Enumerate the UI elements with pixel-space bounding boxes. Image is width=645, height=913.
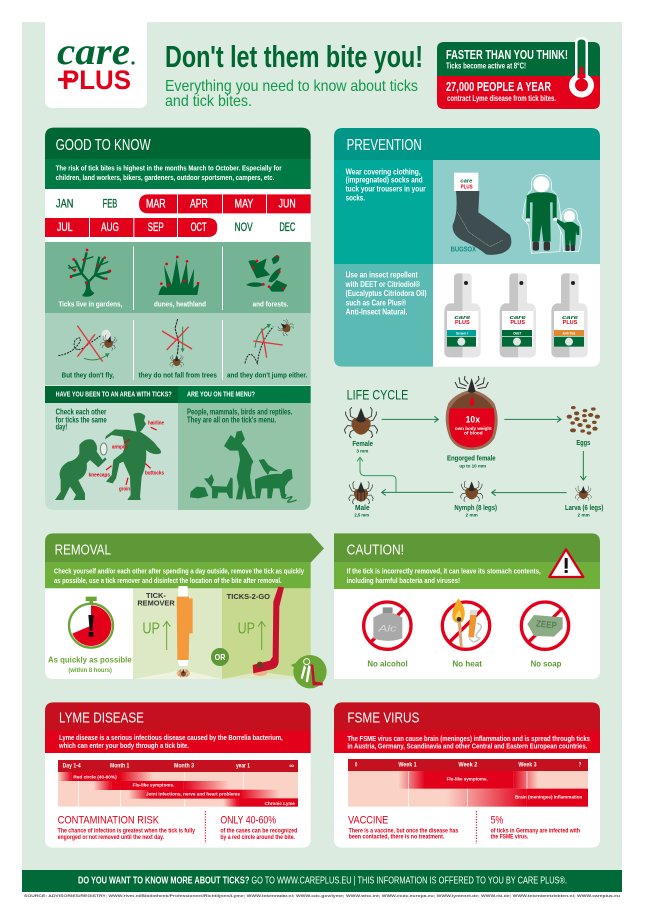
title: Don't let them bite you! <box>165 39 423 74</box>
panel: caution: No soap <box>531 660 561 669</box>
subtitle: and tick bites. <box>165 93 252 110</box>
timeline chart: fsme: Week 2 <box>458 763 478 769</box>
icon: repellent bottle, sensitive <box>444 273 481 357</box>
calendar of months: MAY <box>235 198 253 211</box>
text block: only 40-60%: ONLY 40-60% <box>220 815 276 827</box>
timeline chart: lyme: Red circle (40-60%) <box>73 774 117 780</box>
timeline chart: lyme: Flu-like symptoms. <box>133 783 175 789</box>
icon: sock: care <box>460 178 472 184</box>
text block: removal instructions: as possible, use a tick remover and disinfect the location of the bite after removal. <box>54 576 282 585</box>
misconceptions row: they do not fall from trees <box>139 370 217 379</box>
calendar of months: OCT <box>191 221 207 234</box>
heading: fsme virus <box>334 702 600 731</box>
icon: no soap: ZEEP <box>536 619 557 631</box>
heading: prevention <box>334 128 600 160</box>
stage: engorged female: of blood <box>464 430 483 436</box>
heading: good to know: GOOD TO KNOW <box>56 137 151 154</box>
badge: or <box>211 648 229 666</box>
repellent advice: Anti-Insect Natural. <box>346 308 407 317</box>
misconceptions row <box>45 313 311 385</box>
panel: caution: No heat <box>452 660 482 669</box>
text block: 5 percent: of ticks in Germany are infected with <box>491 829 580 835</box>
icon: repellent bottle, DEET: DEET <box>513 331 522 335</box>
icon: sock <box>451 173 511 255</box>
source line: SOURCE: ADVISORIES/REGISTRY; WWW.rivm.nl/Bibliotheek/Professioneel/Richtlijnen/Lyme; WWW.tekenradar.nl; WWW.cdc.gov/lyme; WWW.who.int; WWW.ecdc.europa.eu; WWW.lymenet.de; WWW.rki.de; WWW.tekenbeetziekten.nl; WWW.careplus.eu <box>24 894 620 898</box>
text block: removal instructions: Check yourself and/or each other after spending a day outside, remove the tick as quickly <box>54 567 305 576</box>
panel: tick check and menu <box>45 386 311 510</box>
heading: prevention: PREVENTION <box>347 137 422 154</box>
icon: repellent bottle, DEET: PLUS <box>510 320 525 326</box>
icon: repellent bottle, sensitive: care <box>454 315 470 321</box>
icon: leaves <box>246 255 287 292</box>
timeline chart: lyme: Joint infections, nerve and heart problems <box>146 792 240 798</box>
tool: ticks-2-go: UP <box>238 620 255 637</box>
habitat row: Ticks live in gardens, <box>58 300 122 309</box>
clothing advice <box>334 160 600 264</box>
stage: eggs <box>567 406 600 447</box>
body part labels: hairline <box>148 421 164 427</box>
timeline chart: fsme <box>348 759 588 807</box>
heading: removal <box>45 533 324 563</box>
stage: nymph <box>454 481 497 519</box>
text block: removal instructions <box>45 563 311 588</box>
stage: engorged female: 10x <box>466 415 480 425</box>
sub-panel: are you on the menu: ARE YOU ON THE MENU? <box>187 390 255 399</box>
timeline chart: fsme: Flu-like symptoms. <box>447 776 488 782</box>
repellent advice <box>334 264 600 367</box>
text block: vaccine: VACCINE <box>348 815 388 827</box>
text block: vaccine: There is a vaccine, but once the disease has <box>349 829 459 835</box>
header: logo <box>45 22 147 108</box>
clothing advice: socks. <box>346 194 365 203</box>
text block: lyme description <box>45 731 311 753</box>
clothing advice: tuck your trousers in your <box>346 185 426 194</box>
timeline chart: fsme: Week 1 <box>398 763 417 769</box>
stage: female tick: 3 mm <box>356 448 369 454</box>
stage: engorged female <box>446 376 498 469</box>
icon: repellent bottle, Anti-Insect: Anti-Tick <box>563 331 576 335</box>
timer: as quickly as possible: (within 8 hours) <box>68 667 112 674</box>
icon: adult and child in covering clothes <box>523 174 582 253</box>
stage: female tick: Female <box>352 441 373 448</box>
clothing advice: Wear covering clothing, <box>346 167 421 176</box>
sub-panel: have you been to an area with ticks: for ticks the same <box>56 415 107 424</box>
body part labels <box>89 421 164 493</box>
footer banner <box>22 870 622 892</box>
text block: only 40-60% <box>220 815 298 841</box>
stage: female tick <box>344 407 378 454</box>
subtitle: Everything you need to know about ticks <box>165 78 418 95</box>
repellent advice: such as Care Plus® <box>346 298 406 307</box>
sub-panel: are you on the menu: They are all on the tick's menu. <box>187 415 276 424</box>
icon: repellent bottle, sensitive: PLUS <box>455 320 470 326</box>
timeline chart: lyme: Month 3 <box>174 764 195 770</box>
icon: sock: BUGSOX <box>451 245 476 254</box>
calendar of months: AUG <box>101 221 119 234</box>
icon: tree <box>68 249 111 296</box>
icon: tick does not fly <box>58 326 118 362</box>
icon: repellent bottle, Anti-Insect <box>551 273 588 357</box>
text block: vaccine <box>348 815 459 841</box>
timeline chart: lyme: year 1 <box>236 764 251 770</box>
text block: contamination risk: engorged or not removed until the next day. <box>58 835 164 841</box>
panel: removal <box>45 533 327 688</box>
stage: engorged female: up to 10 mm <box>459 463 487 469</box>
calendar of months: SEP <box>148 221 164 234</box>
misconceptions row: But they don't fly, <box>62 370 114 379</box>
calendar of months: JUN <box>279 198 296 211</box>
text block: risk months: children, land workers, bikers, gardeners, outdoor sportsmen, campers, etc. <box>56 173 274 182</box>
stage: engorged female: Engorged female <box>447 456 496 463</box>
header: logo: PLUS <box>62 65 131 95</box>
text block: lyme description: which can enter your body through a tick bite. <box>58 741 189 750</box>
heading: caution: CAUTION! <box>347 542 404 558</box>
timeline chart: fsme: ? <box>579 763 582 769</box>
sub-panel: have you been to an area with ticks <box>45 386 178 510</box>
heading: fsme virus: FSME VIRUS <box>347 711 420 727</box>
stage: larva <box>565 486 603 519</box>
text block: vaccine: been contacted, there is no treatment. <box>349 835 445 841</box>
repellent advice: (Eucalyptus Citriodora Oil) <box>346 289 427 298</box>
calendar of months: JAN <box>56 198 73 211</box>
heading: lyme disease <box>45 702 311 731</box>
text block: caution warning <box>334 563 600 589</box>
text block: fsme description <box>334 731 600 753</box>
callout: facts with thermometer: 27,000 PEOPLE A YEAR <box>446 79 551 94</box>
icon: repellent bottle, Anti-Insect: PLUS <box>563 320 578 326</box>
icon: repellent bottle, sensitive: Sensor I <box>456 331 468 335</box>
icon: tick does not jump <box>245 318 295 363</box>
sub-panel: have you been to an area with ticks: Check each other <box>56 408 106 417</box>
badge: or: OR <box>215 652 226 662</box>
icon: warning triangle <box>549 549 583 577</box>
calendar of months: APR <box>190 198 208 211</box>
panel: caution <box>334 533 600 679</box>
callout: facts with thermometer: contract Lyme disease from tick bites. <box>447 94 556 103</box>
text block: caution warning: If the tick is incorrectly removed, it can leave its stomach contents, <box>347 567 541 576</box>
text block: only 40-60%: by a red circle around the bite. <box>220 835 295 841</box>
body part labels: buttocks <box>145 471 164 477</box>
callout: facts with thermometer: Ticks become active at 8°C! <box>446 62 526 70</box>
stage: eggs: Eggs <box>576 440 590 447</box>
tool: tick remover: TICK- <box>146 591 167 600</box>
callout: facts with thermometer: FASTER THAN YOU THINK! <box>446 47 568 62</box>
clothing advice: (impregnated) socks and <box>346 176 423 185</box>
text block: only 40-60%: of the cases can be recognized <box>220 829 298 835</box>
sub-panel: are you on the menu: People, mammals, birds and reptiles. <box>187 408 292 417</box>
text block: 5 percent: the FSME virus. <box>491 835 529 841</box>
timeline chart: fsme: 0 <box>355 763 358 769</box>
icon: no soap <box>521 602 569 649</box>
stage: larva: 2 mm <box>578 513 590 519</box>
stage: larva: Larva (6 legs) <box>565 505 603 512</box>
icon: crouching person with magnifier <box>55 439 107 500</box>
calendar of months: DEC <box>279 221 295 234</box>
repellent advice: Use an insect repellent <box>346 271 418 280</box>
panel: caution: No alcohol <box>367 660 408 669</box>
text block: risk months: The risk of tick bites is highest in the months March to October. Especially for <box>56 164 282 173</box>
subtitle <box>165 78 418 110</box>
arrows between stages <box>357 416 586 496</box>
timeline chart: lyme: Day 1-4 <box>63 764 81 770</box>
icon: no alcohol: Alc <box>377 624 397 634</box>
tool: tick remover <box>133 586 222 679</box>
panel: lyme disease <box>45 702 311 848</box>
timeline chart: fsme: Brain (meninges) inflammation <box>515 795 582 801</box>
tool: ticks-2-go: TICKS-2-GO <box>227 592 270 601</box>
habitat row <box>45 242 311 313</box>
icon: person, pets and animals silhouettes <box>190 431 293 499</box>
body part labels: kneecaps <box>89 473 110 479</box>
icon: repellent bottle, Anti-Insect: care <box>562 315 578 321</box>
calendar of months: FEB <box>103 198 117 211</box>
timer: as quickly as possible: As quickly as possible <box>48 655 132 665</box>
panel: fsme virus <box>334 702 600 848</box>
repellent advice: with DEET or Citriodiol® <box>345 280 420 289</box>
habitat row: dunes, heathland <box>154 300 206 309</box>
stage: male: 2,5 mm <box>354 513 369 519</box>
timeline chart: fsme: Week 3 <box>518 763 537 769</box>
heading: lyme disease: LYME DISEASE <box>59 711 144 727</box>
calendar of months: NOV <box>235 221 253 234</box>
icon: keyring tool <box>291 655 327 688</box>
calendar of months <box>45 189 311 242</box>
timeline chart: lyme: ∞ <box>289 764 294 770</box>
habitat row: and forests. <box>253 300 288 309</box>
text block: caution warning: including harmful bacteria and viruses! <box>347 576 460 585</box>
calendar of months: MAR <box>146 198 166 211</box>
icon: tick does not fall from trees <box>162 319 192 367</box>
stage: male: Male <box>355 505 370 512</box>
panel: good to know <box>45 128 311 385</box>
body part labels: groin <box>119 487 130 493</box>
text block: contamination risk: CONTAMINATION RISK <box>58 815 160 827</box>
misconceptions row: and they don't jump either. <box>227 370 307 379</box>
body part labels: armpits <box>112 445 128 451</box>
text block: risk months <box>45 159 311 189</box>
icon: no alcohol <box>364 602 411 649</box>
icon: sock: PLUS <box>461 184 473 190</box>
timeline chart: lyme: Chronic Lyme <box>265 801 295 807</box>
timeline chart: lyme <box>58 760 298 807</box>
text block: 5 percent: 5% <box>491 815 504 827</box>
stage: nymph: Nymph (8 legs) <box>454 505 497 512</box>
tool: tick remover: REMOVER <box>137 599 175 608</box>
callout: facts with thermometer <box>437 37 600 109</box>
heading: caution <box>334 533 600 563</box>
heading: life cycle: LIFE CYCLE <box>347 386 408 402</box>
tool: ticks-2-go <box>222 587 311 679</box>
text block: lyme description: Lyme disease is a serious infectious disease caused by the Borrelia bacterium, <box>59 733 283 742</box>
text block: contamination risk <box>58 815 196 841</box>
sub-panel: have you been to an area with ticks: day! <box>56 423 67 432</box>
icon: no heat <box>442 598 490 649</box>
text block: 5 percent <box>491 815 580 841</box>
white body <box>334 589 600 679</box>
panel: life cycle <box>344 376 603 519</box>
timer: as quickly as possible <box>45 588 133 679</box>
heading: removal: REMOVAL <box>55 542 111 558</box>
heading: good to know <box>45 128 311 159</box>
icon: grass <box>158 256 199 295</box>
icon: repellent bottle, DEET <box>500 273 536 357</box>
sub-panel: are you on the menu <box>178 386 311 510</box>
stage: nymph: 2 mm <box>466 513 478 519</box>
calendar of months: JUL <box>57 221 73 234</box>
sub-panel: have you been to an area with ticks: HAVE YOU BEEN TO AN AREA WITH TICKS? <box>56 390 172 399</box>
timeline chart: lyme: Month 1 <box>110 764 130 770</box>
tool: tick remover: UP <box>142 620 160 637</box>
icon: standing person <box>105 413 161 500</box>
stage: male <box>349 481 373 519</box>
text block: contamination risk: The chance of infection is greatest when the tick is fully <box>58 829 196 835</box>
header: logo: care <box>57 31 130 73</box>
panel: prevention <box>334 128 600 367</box>
icon: repellent bottle, DEET: care <box>510 315 526 321</box>
stage: engorged female: own body weight <box>455 426 492 432</box>
